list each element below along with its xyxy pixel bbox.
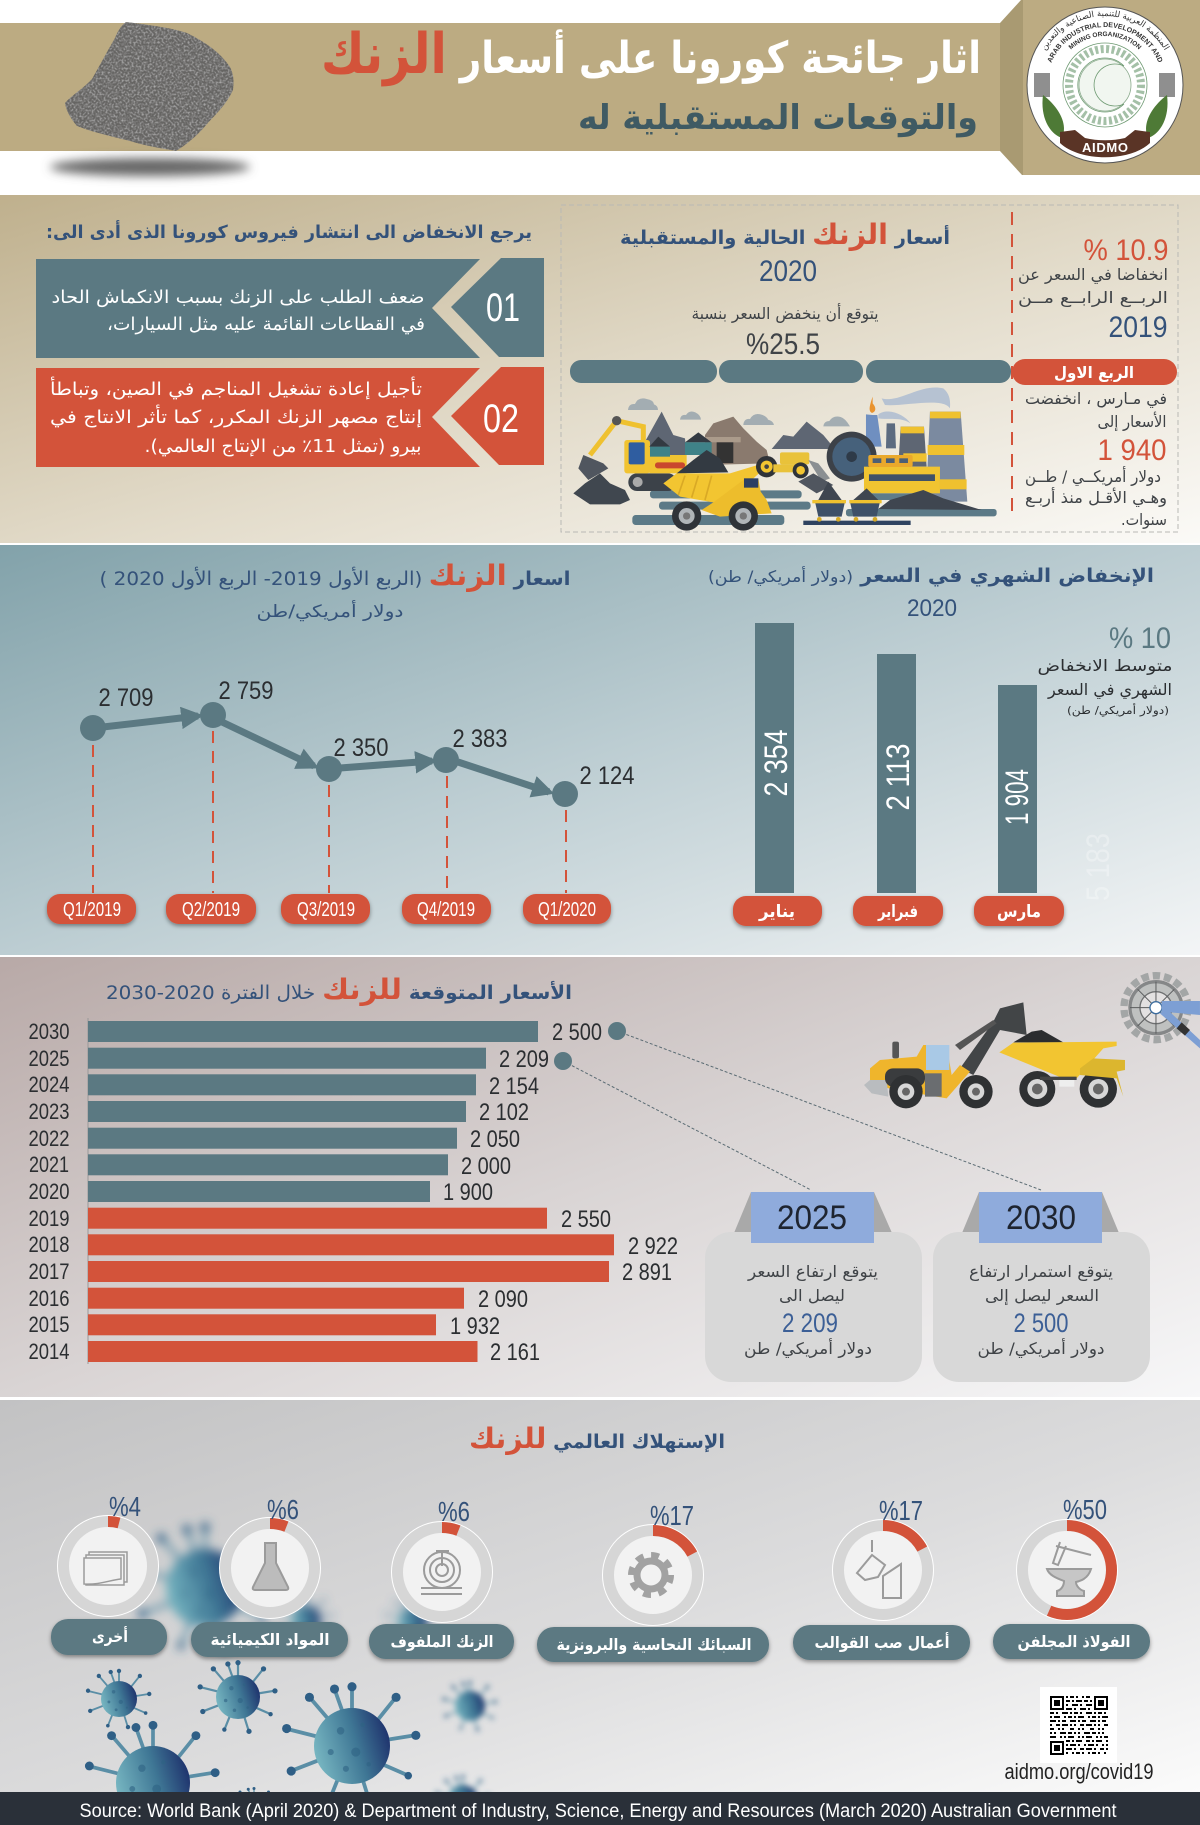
bar chart: yearly prices: 2021 — [29, 1152, 69, 1177]
panel: forecast prices — [0, 957, 1200, 1397]
stat: 10.9 percent: % 10.9 — [1084, 234, 1168, 267]
item: galvanized steel 50 percent: الفولاذ المجلفن — [1018, 1632, 1130, 1651]
quarter labels — [47, 894, 611, 924]
logo: AIDMO emblem: المنظمة العربية للتنمية الصناعية والتعدين — [1044, 10, 1170, 50]
bar chart: yearly prices: 2 154 — [489, 1073, 539, 1100]
item: other 4 percent — [51, 1491, 167, 1655]
bar chart: yearly prices — [28, 1018, 678, 1366]
bar chart: months: 2 113 — [880, 744, 916, 810]
heading: current prices: أسعار الزنك الحالية والمستقبلية — [620, 218, 950, 251]
cause 02: 02 — [483, 397, 519, 441]
item: other 4 percent: أخرى — [92, 1626, 128, 1646]
logo: AIDMO emblem: AIDMO — [1082, 140, 1128, 155]
month label: February — [853, 896, 943, 926]
bar chart: yearly prices: 1 900 — [443, 1179, 493, 1206]
cause 02: تأجيل إعادة تشغيل المناجم في الصين، وتباطأ — [50, 376, 422, 400]
month label: March: مارس — [997, 902, 1041, 922]
item: other 4 percent: %4 — [109, 1491, 141, 1522]
item: copper and bronze alloys 17 percent — [537, 1500, 769, 1662]
rock shadow — [50, 158, 250, 176]
bar chart: yearly prices: 2 050 — [470, 1126, 520, 1153]
callout: 2025: 2025 — [777, 1199, 847, 1237]
month label: March — [974, 896, 1064, 926]
stat: March price: دولار أمريكــي / طــن — [1025, 466, 1161, 487]
stat: 10.9 percent — [1018, 234, 1168, 344]
stat: March price: سنوات. — [1121, 510, 1167, 530]
quarter labels: Q4/2019 — [417, 899, 475, 921]
quarter labels: Q3/2019 — [297, 899, 355, 921]
heading: quarterly prices: اسعار الزنك (الربع الأول 2019- الربع الأول 2020 ) — [100, 559, 570, 592]
bar chart: months: 1 904 — [999, 769, 1035, 825]
first quarter pill — [1012, 359, 1177, 385]
footer source bar — [0, 1792, 1200, 1825]
unit label: دولار أمريكي/طن — [256, 600, 404, 622]
quarter labels: Q1/2020 — [538, 899, 596, 921]
bar chart: yearly prices: 1 932 — [450, 1313, 500, 1340]
bar chart: yearly prices: 2015 — [28, 1312, 70, 1337]
item: rolled zinc 6 percent: الزنك الملفوف — [390, 1632, 494, 1651]
bar chart: yearly prices: 2 922 — [628, 1233, 678, 1260]
bar chart: yearly prices: 2023 — [28, 1099, 70, 1124]
panel: monthly decline and quarterly prices — [0, 545, 1200, 955]
average decline note: % 10 — [1109, 622, 1171, 655]
stat: March price: في مـارس ، انخفضت — [1025, 389, 1167, 409]
cause 02 — [36, 367, 544, 467]
zinc ore rock — [65, 22, 234, 151]
panel: current prices and causes — [0, 195, 1200, 543]
title line 2: والتوقعات المستقبلية له — [578, 98, 978, 138]
year 2020: 2020 — [759, 255, 817, 288]
line chart: quarterly prices: 2 759 — [218, 677, 274, 705]
item: galvanized steel 50 percent: %50 — [1063, 1494, 1107, 1525]
average decline note: الشهري في السعر — [1047, 680, 1172, 700]
month label: January: يناير — [758, 902, 795, 922]
bar chart: yearly prices: 2 891 — [622, 1259, 672, 1286]
item: chemicals 6 percent: %6 — [267, 1494, 299, 1525]
month label: January — [733, 896, 822, 926]
bar chart: months: 2 354 — [758, 730, 794, 796]
year label: 2020 — [907, 595, 957, 622]
item: die casting 17 percent: %17 — [879, 1495, 923, 1526]
callout: 2025: 2 209 — [782, 1308, 838, 1338]
callout: 2025: يتوقع ارتفاع السعر — [747, 1262, 878, 1282]
logo: AIDMO emblem — [1026, 6, 1184, 164]
panel: global consumption — [0, 1400, 1200, 1825]
callout: 2025 — [705, 1192, 922, 1382]
bar chart: yearly prices: 2 161 — [490, 1339, 540, 1366]
bar chart: months: 5 183 — [1080, 833, 1116, 901]
illustration: bucket wheel — [1124, 976, 1200, 1048]
footer source bar: Source: World Bank (April 2020) & Department of Industry, Science, Energy and Resources (March 2020) Australian Government — [80, 1801, 1117, 1822]
header logo plate — [1000, 0, 1200, 175]
bar chart: yearly prices: 2030 — [28, 1019, 70, 1044]
stat: March price: 1 940 — [1098, 434, 1166, 467]
month label: February: فبراير — [877, 902, 918, 922]
title line 1: اثار جائحة كورونا على أسعار الزنك — [321, 22, 981, 87]
bar chart: yearly prices: 2025 — [28, 1046, 70, 1071]
illustration: loader and dump truck — [864, 1002, 1125, 1108]
item: rolled zinc 6 percent — [369, 1496, 514, 1659]
item: die casting 17 percent: أعمال صب القوالب — [814, 1632, 950, 1652]
cause 02: إنتاج مصهر الزنك المكرر، كما تأثر الانتاج في — [50, 404, 422, 428]
cause 01: في القطاعات القائمة عليه مثل السيارات، — [107, 314, 425, 335]
logo: AIDMO emblem: MINING ORGANIZATION — [1068, 32, 1142, 50]
average decline note: متوسط الانخفاض — [1038, 656, 1172, 676]
callout: 2030: دولار أمريكي/ طن — [978, 1338, 1104, 1359]
QR code — [1040, 1687, 1117, 1763]
callout: 2030: 2 500 — [1014, 1308, 1068, 1338]
website link text: aidmo.org/covid19 — [1004, 1759, 1154, 1784]
heading: monthly decline: الإنخفاض الشهري في السعر (دولار أمريكي/ طن) — [708, 565, 1154, 588]
first quarter pill: الربع الاول — [1054, 363, 1134, 382]
item: copper and bronze alloys 17 percent: %17 — [650, 1500, 694, 1531]
background viruses — [133, 1522, 440, 1654]
bar chart: yearly prices: 2014 — [28, 1339, 70, 1364]
average decline note: (دولار أمريكي/ طن) — [1067, 703, 1169, 717]
stat: March price — [1025, 389, 1167, 530]
forecast note: يتوقع أن ينخفض السعر بنسبة — [692, 303, 878, 324]
item: chemicals 6 percent — [191, 1494, 348, 1657]
red dashed divider — [1011, 212, 1013, 518]
line chart: quarterly prices: 2 124 — [580, 762, 635, 790]
cause 01: ضعف الطلب على الزنك بسبب الانكماش الحاد — [52, 287, 424, 308]
stat: March price: وهـي الأقـل منذ أربـع — [1025, 487, 1167, 508]
bar chart: yearly prices: 2 102 — [479, 1099, 529, 1126]
callout: 2030: يتوقع استمرار ارتفاع — [969, 1262, 1113, 1282]
line chart: quarterly prices: 2 709 — [98, 684, 154, 712]
callout: 2030: 2030 — [1006, 1199, 1076, 1237]
callout: 2030: السعر ليصل إلى — [985, 1286, 1099, 1306]
item: copper and bronze alloys 17 percent: السبائك النحاسية والبرونزية — [556, 1635, 752, 1654]
bar chart: yearly prices: 2019 — [28, 1206, 70, 1231]
stat: March price: الأسعار إلى — [1098, 411, 1166, 432]
header band — [0, 0, 1200, 175]
title — [321, 22, 981, 138]
bar chart: yearly prices: 2022 — [28, 1126, 70, 1151]
bar chart: yearly prices: 2 500 — [552, 1019, 602, 1046]
cause 02: بيرو (تمثل 11٪ من الإنتاج العالمي). — [144, 436, 422, 457]
line chart: quarterly prices: 2 383 — [452, 725, 508, 753]
illustration: mining site — [573, 388, 997, 531]
heading: causes: يرجع الانخفاض الى انتشار فيروس كورونا الذى أدى الى: — [46, 220, 532, 243]
line chart: quarterly prices — [47, 677, 635, 924]
logo: AIDMO emblem: ARAB INDUSTRIAL DEVELOPMENT AND — [1048, 22, 1162, 63]
item: rolled zinc 6 percent: %6 — [438, 1496, 470, 1527]
line chart: quarterly prices: 2 350 — [334, 734, 388, 762]
stat: 10.9 percent: انخفاضا في السعر عن — [1018, 265, 1168, 285]
average decline note — [1038, 622, 1172, 717]
bar chart: yearly prices: 2 000 — [461, 1153, 511, 1180]
forecast percent: %25.5 — [746, 328, 820, 361]
cause 01: 01 — [486, 286, 520, 330]
quarter labels: Q1/2019 — [63, 899, 121, 921]
callout: 2025: دولار أمريكي/ طن — [744, 1338, 872, 1359]
bar chart: yearly prices: 2 209 — [499, 1046, 549, 1073]
cause 01 — [36, 258, 544, 358]
bar chart: yearly prices: 2 090 — [478, 1286, 528, 1313]
item: die casting 17 percent — [793, 1495, 970, 1660]
bar chart: yearly prices: 2018 — [28, 1232, 70, 1257]
bar chart: months — [733, 623, 1116, 926]
quarter labels: Q2/2019 — [182, 899, 240, 921]
callout: 2030 — [933, 1192, 1150, 1382]
item: chemicals 6 percent: المواد الكيميائية — [210, 1630, 330, 1649]
callout: 2025: ليصل الى — [779, 1286, 845, 1305]
stat: 10.9 percent: الربــع الرابــع مــن — [1018, 288, 1168, 308]
dashed frame — [561, 205, 1178, 532]
bar chart: yearly prices: 2024 — [28, 1072, 70, 1097]
heading: consumption: الإستهلاك العالمي للزنك — [469, 1422, 725, 1455]
progress bar segments — [570, 360, 1011, 383]
connector dots and leaders — [554, 1022, 1041, 1190]
stat: 10.9 percent: 2019 — [1108, 311, 1168, 344]
item: galvanized steel 50 percent — [993, 1494, 1150, 1659]
bar chart: yearly prices: 2020 — [28, 1179, 70, 1204]
foreground viruses — [85, 1660, 497, 1825]
bar chart: yearly prices: 2 550 — [561, 1206, 611, 1233]
bar chart: yearly prices: 2017 — [28, 1259, 70, 1284]
bar chart: yearly prices: 2016 — [28, 1286, 70, 1311]
heading: forecast prices: الأسعار المتوقعة للزنك خلال الفترة 2020-2030 — [106, 973, 572, 1006]
